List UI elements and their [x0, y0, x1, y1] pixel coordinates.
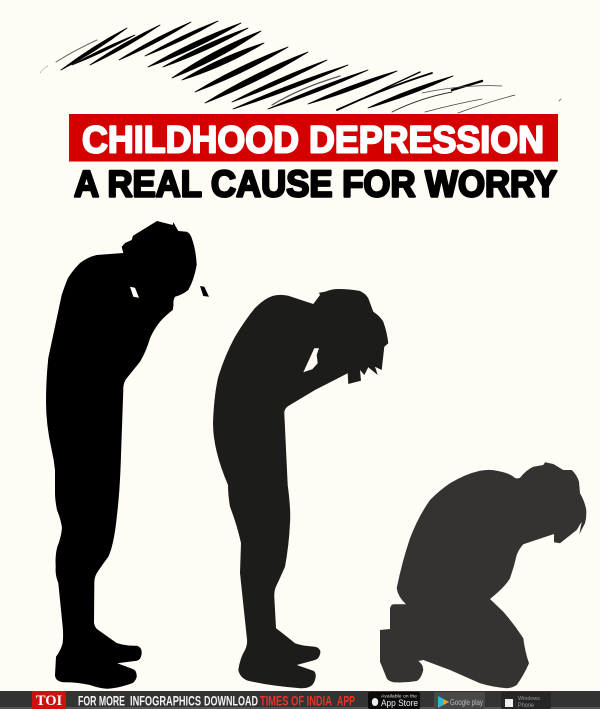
- footer message: FOR MORE: [78, 692, 125, 708]
- App Store badge: App Store: [381, 698, 418, 708]
- App Store badge: Available on the: [381, 694, 418, 698]
- scribble decoration: [40, 21, 561, 113]
- tear shard: [200, 286, 209, 297]
- Windows Phone badge: Phone: [518, 703, 535, 709]
- title line one: CHILDHOOD DEPRESSION: [82, 120, 544, 162]
- silhouette: middle standing figure: [213, 289, 388, 688]
- App Store badge: [368, 692, 420, 709]
- footer bar: [0, 691, 600, 709]
- silhouette: tallest standing figure: [46, 221, 209, 689]
- TOI logo: TOI: [36, 693, 63, 709]
- footer message: INFOGRAPHICS: [130, 692, 201, 708]
- subtitle: A REAL CAUSE FOR WORRY: [74, 164, 557, 204]
- silhouette: kneeling figure: [380, 462, 586, 688]
- title banner: [69, 114, 558, 162]
- footer message: APP: [337, 692, 355, 708]
- TOI logo: [32, 691, 66, 709]
- Windows Phone badge: Windows: [518, 696, 541, 702]
- Windows Phone badge: [501, 692, 551, 709]
- Google Play badge: [434, 692, 485, 709]
- footer message: DOWNLOAD: [204, 692, 258, 708]
- footer message: [78, 692, 355, 708]
- footer message: TIMES OF INDIA: [260, 692, 332, 708]
- Google Play badge: Google play: [450, 698, 483, 707]
